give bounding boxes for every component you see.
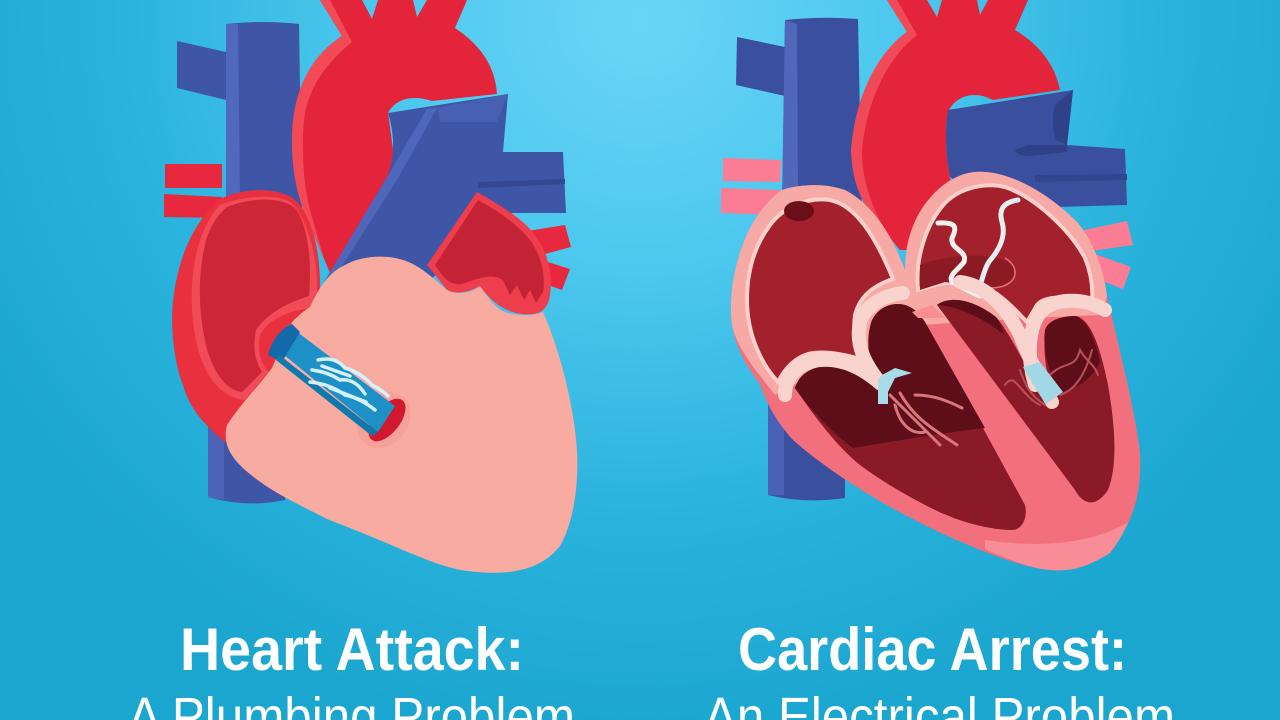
heading: heart attack <box>128 616 575 720</box>
heading: cardiac arrest <box>704 616 1175 720</box>
pink vessels <box>721 158 1133 289</box>
left ventricle chamber <box>937 300 1114 502</box>
right vessels <box>515 225 571 290</box>
heart illustration: heart attack <box>164 0 577 573</box>
vena cava <box>736 18 862 500</box>
pulmonary artery <box>946 90 1127 215</box>
pulmonary valve shadow <box>920 256 1015 290</box>
tendon strands left ventricle <box>1005 350 1098 405</box>
left atrium <box>427 192 551 314</box>
blue valve right ventricle <box>878 368 912 404</box>
heart illustration: cardiac arrest <box>721 0 1140 570</box>
blue valve left ventricle <box>1023 362 1063 404</box>
stent in coronary artery <box>268 324 421 458</box>
title: Heart Attack: <box>180 616 524 683</box>
tendon strands right ventricle <box>890 393 962 445</box>
electrical signal lines <box>938 200 1018 296</box>
left vessels <box>164 164 222 218</box>
title: Cardiac Arrest: <box>738 616 1127 683</box>
right atrium chamber <box>747 199 893 382</box>
aorta <box>851 0 1060 250</box>
dark spot <box>784 201 814 221</box>
aorta <box>292 0 497 285</box>
left ventricle valve ribbon <box>960 282 1105 402</box>
superior and inferior vena cava <box>177 22 302 503</box>
septum highlight <box>912 305 945 318</box>
pulmonary artery <box>323 94 566 284</box>
ventricle <box>226 257 577 573</box>
right ventricle valve ribbon <box>785 293 903 395</box>
right ventricle chamber <box>795 304 1026 530</box>
left atrium chamber <box>917 185 1092 322</box>
cut-away heart outer wall <box>731 172 1140 570</box>
right atrium <box>172 190 320 442</box>
